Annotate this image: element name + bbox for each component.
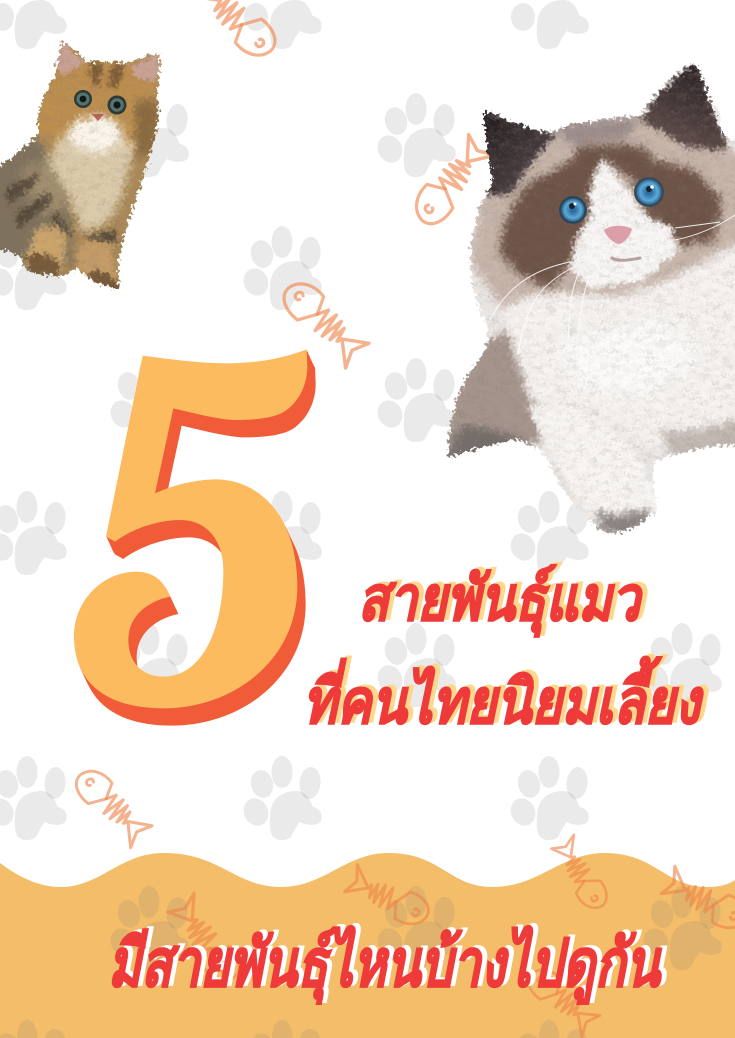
photo: ragdoll cat <box>440 55 735 545</box>
number face <box>74 349 307 708</box>
photo: small golden kitten <box>0 35 170 295</box>
cat nose <box>604 226 632 244</box>
band paw pattern <box>0 886 722 1038</box>
cat whiskers <box>490 215 735 355</box>
cat ears <box>480 108 555 195</box>
cat white chest <box>500 235 735 450</box>
kitten nose <box>92 114 104 121</box>
kitten forehead stripes <box>90 62 124 88</box>
kitten grey body <box>0 135 72 280</box>
kitten chest <box>48 135 135 232</box>
orange wavy footer band <box>0 853 735 1038</box>
cat white blaze and muzzle <box>570 158 680 288</box>
heading line one: สายพันธุ์แมว <box>363 562 648 636</box>
kitten head <box>36 50 160 149</box>
cat eyes <box>559 177 664 224</box>
big number 5 <box>74 349 316 726</box>
number extrusion <box>75 351 316 726</box>
paws cut by the top edge <box>0 0 589 49</box>
cat grey forehead <box>550 118 640 145</box>
background paw pattern <box>0 0 722 840</box>
kitten ears <box>56 41 160 82</box>
kitten white muzzle <box>69 116 123 152</box>
cat front leg <box>527 404 657 535</box>
cat brown mask <box>500 145 722 290</box>
heading line one: สายพันธุ์แมว <box>358 564 643 638</box>
cat head cream <box>470 110 735 320</box>
cat mouth <box>612 258 640 260</box>
cat left flank <box>440 330 545 465</box>
kitten body stripes <box>5 172 118 250</box>
kitten eyes <box>74 90 126 114</box>
kitten legs <box>24 226 68 272</box>
